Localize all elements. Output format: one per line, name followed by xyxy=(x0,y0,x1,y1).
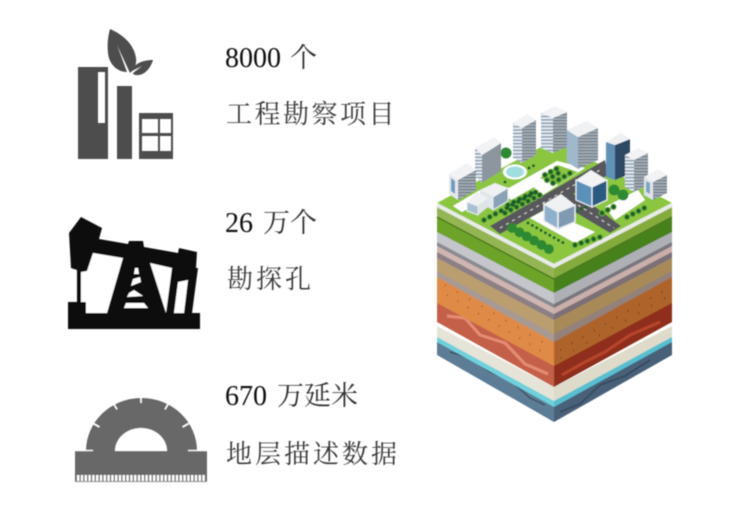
text: 8000 projects: 工程勘察项目 xyxy=(226,100,397,129)
text: 260k boreholes xyxy=(225,208,317,294)
soil layers xyxy=(437,207,672,422)
icon: protractor and ruler xyxy=(75,396,207,482)
text: 8000 projects: 8000 xyxy=(225,43,281,74)
text: 6.7 million metres xyxy=(225,381,400,469)
building: far right block xyxy=(644,169,667,200)
building: low complex xyxy=(467,183,508,215)
text: 260k boreholes: 26 xyxy=(225,208,253,239)
text: 260k boreholes: 勘探孔 xyxy=(227,265,314,294)
ground surface with roads and paths xyxy=(437,140,672,266)
text: 6.7 million metres: 地层描述数据 xyxy=(226,440,400,469)
text: 8000 projects xyxy=(225,43,397,129)
building: back right tower xyxy=(567,121,598,169)
building: back centre tower xyxy=(541,106,567,153)
building: blue cube xyxy=(576,170,607,207)
trees xyxy=(484,148,650,252)
building: back left tower xyxy=(513,114,536,163)
illustration: isometric city on soil layers xyxy=(437,106,672,422)
building: left tower xyxy=(475,137,501,183)
building: front block xyxy=(544,194,575,229)
icon: oil pump jack xyxy=(68,217,200,329)
building: blue tower xyxy=(606,133,630,180)
text: 8000 projects: 个 xyxy=(290,43,317,73)
building: right tower xyxy=(625,148,648,192)
text: 6.7 million metres: 万延米 xyxy=(277,381,358,411)
icon: green buildings with leaves xyxy=(78,29,173,159)
text: 6.7 million metres: 670 xyxy=(225,381,267,412)
building: far left block xyxy=(449,163,476,200)
buildings xyxy=(449,106,667,229)
text: 260k boreholes: 万个 xyxy=(263,208,317,238)
